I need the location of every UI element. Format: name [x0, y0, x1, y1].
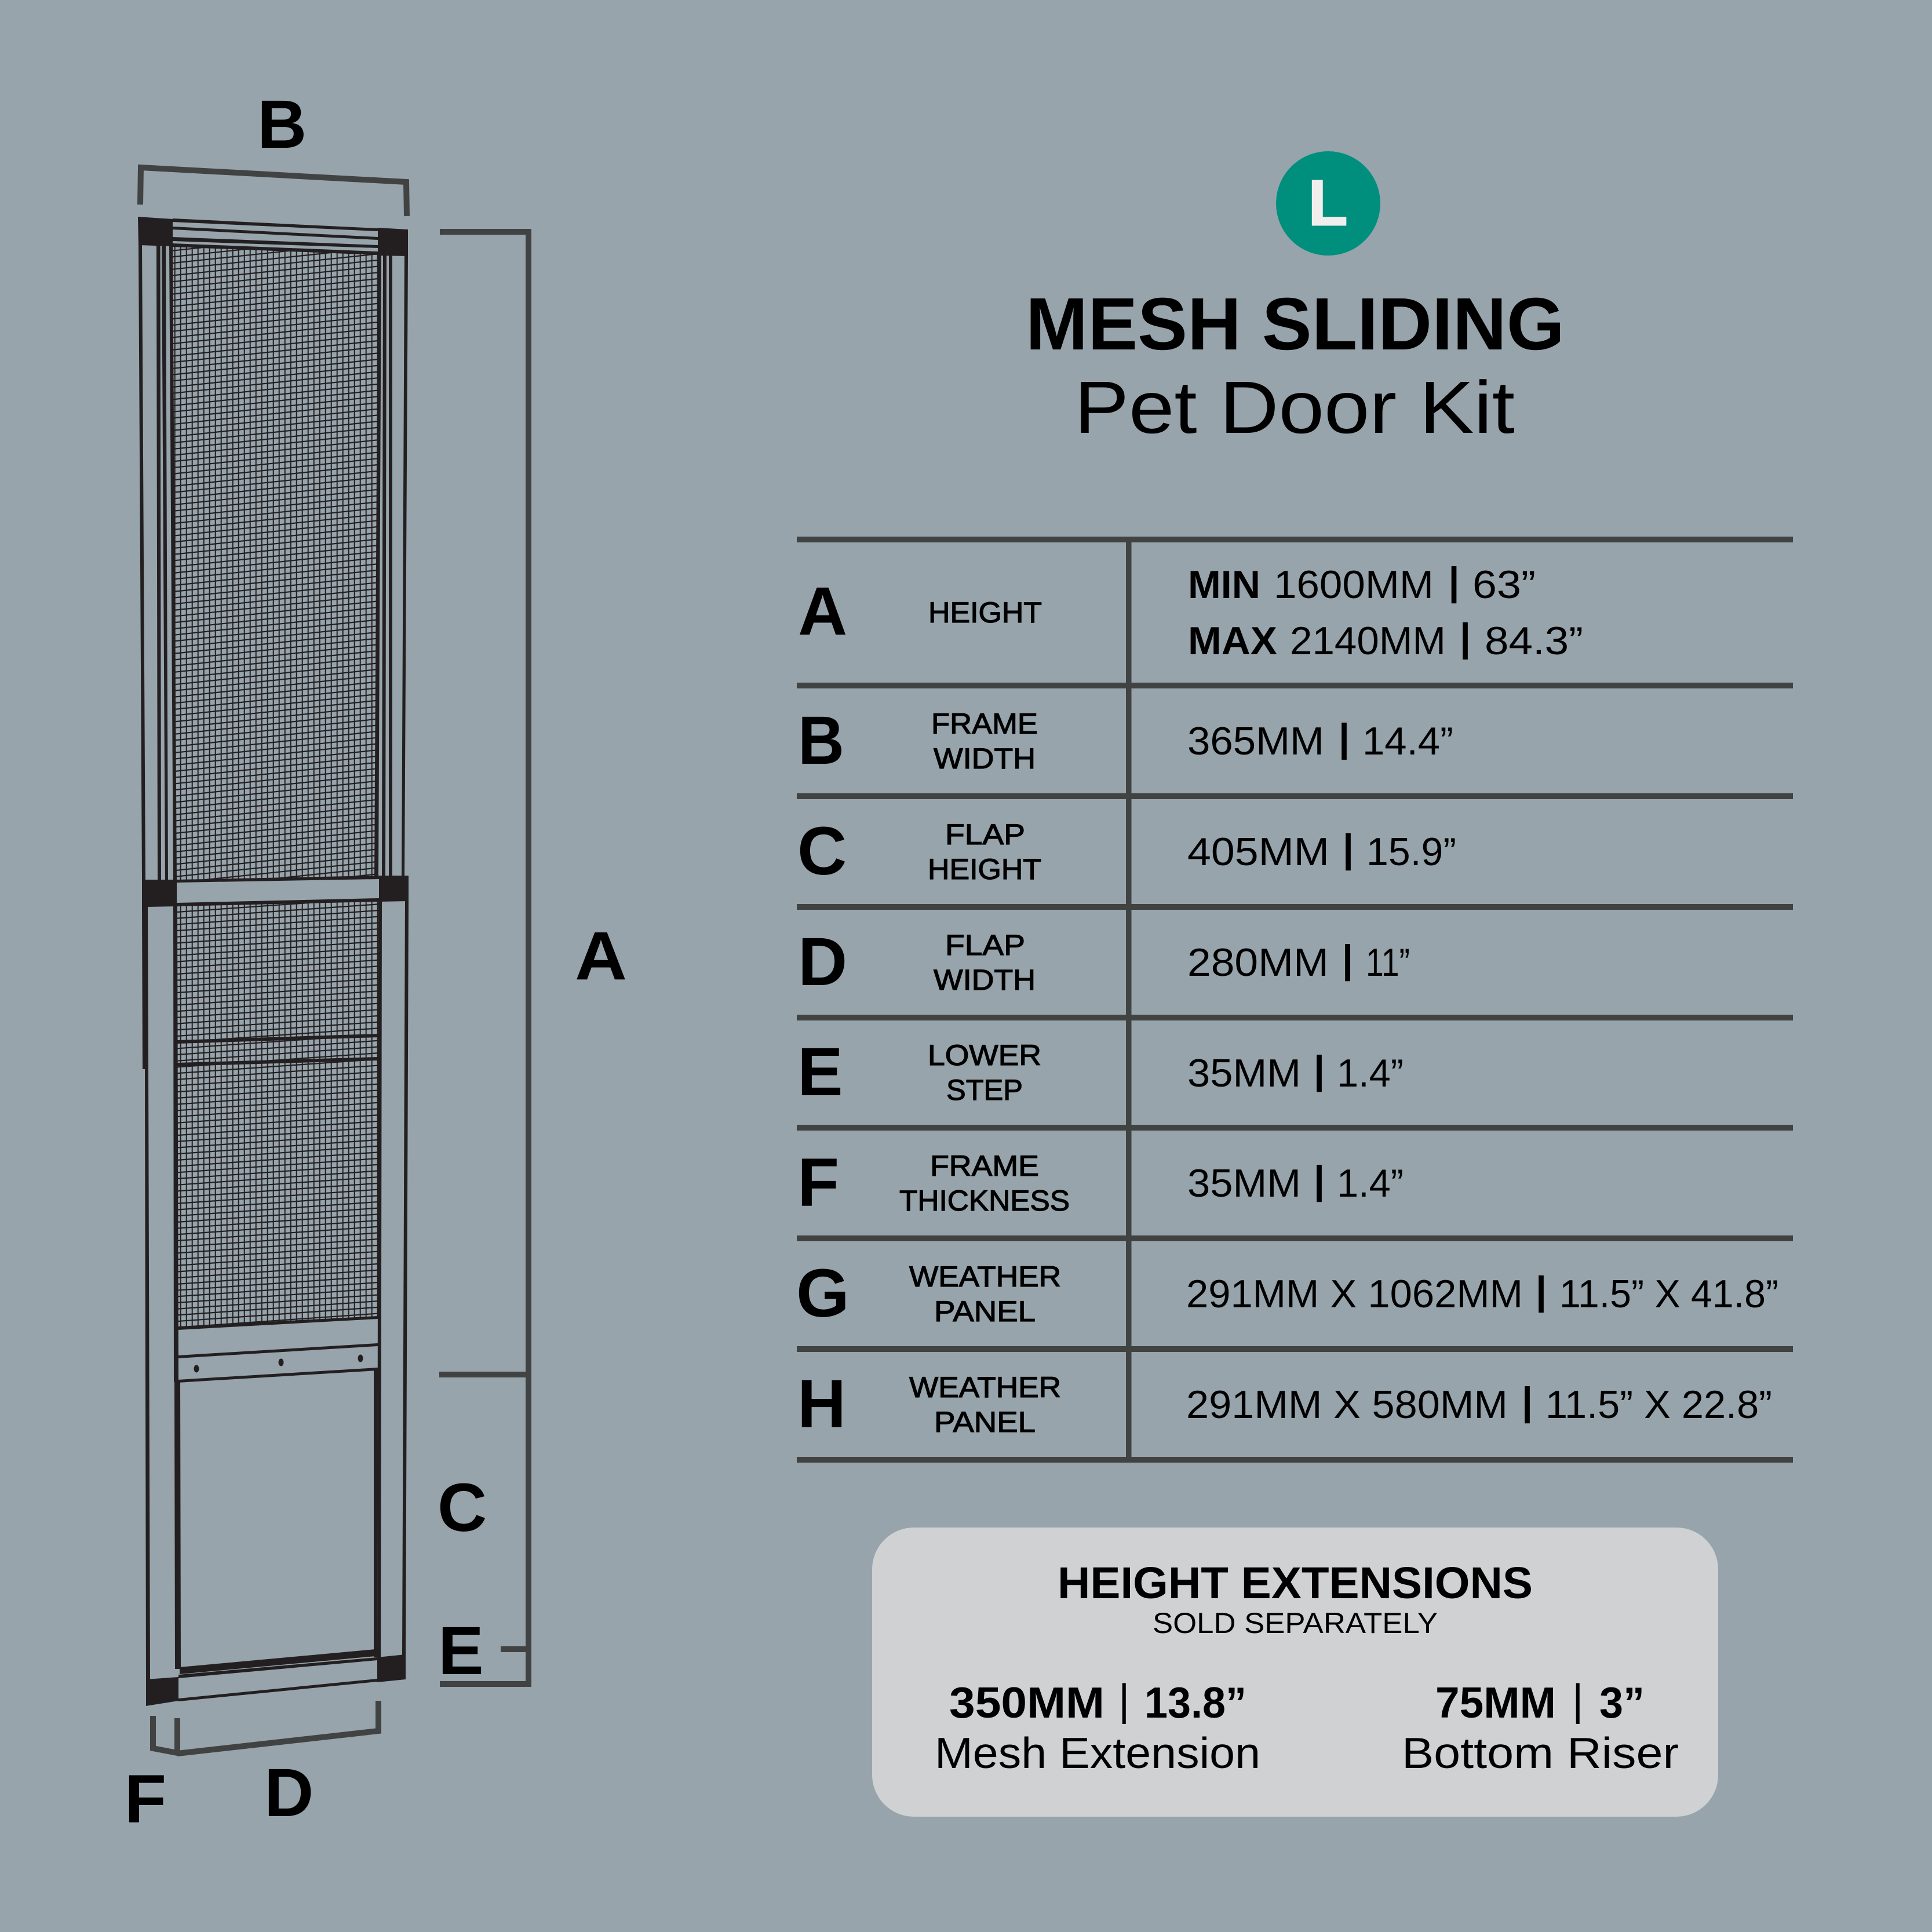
bracket B: [140, 167, 407, 216]
corner block: bottom left: [146, 1677, 178, 1706]
corner block: bottom right: [377, 1654, 406, 1682]
bracket A: [440, 232, 528, 1684]
row H: PANEL: [934, 1406, 1036, 1438]
screws: [194, 1355, 363, 1372]
row C: |: [1343, 826, 1354, 871]
row A: MAX: [1188, 619, 1277, 663]
row E: 35MM: [1187, 1051, 1301, 1095]
upper mesh panel: [173, 247, 378, 880]
row C: FLAP: [945, 818, 1025, 851]
mesh extension: 350MM: [949, 1678, 1104, 1727]
table grid: [797, 537, 1793, 1463]
diagram letter B: B: [257, 86, 307, 163]
row H: H: [797, 1366, 846, 1442]
row E: STEP: [946, 1074, 1023, 1106]
size badge: [1276, 151, 1380, 256]
row A: 84.3”: [1485, 619, 1583, 663]
row F: [797, 1144, 1404, 1221]
row F: THICKNESS: [899, 1184, 1070, 1217]
bracket F: [153, 1716, 177, 1753]
row H: WEATHER: [909, 1371, 1061, 1404]
lower frame rails: [142, 901, 409, 1679]
lower mesh panel: [177, 902, 378, 1326]
lower panel bars: [178, 1316, 378, 1383]
row H: [797, 1366, 1772, 1442]
tick E: [501, 1646, 528, 1652]
row E: [797, 1034, 1404, 1110]
diagram letter A: A: [575, 918, 627, 994]
row A: [798, 559, 1583, 663]
bottom riser: |: [1572, 1675, 1583, 1724]
bottom riser: Bottom Riser: [1402, 1729, 1679, 1777]
row D: WIDTH: [934, 964, 1036, 996]
flap bottom bars: [178, 1649, 377, 1701]
title: MESH SLIDING: [1026, 283, 1565, 366]
row D: D: [798, 924, 847, 1000]
row A: 1600MM: [1274, 563, 1434, 607]
row B: B: [798, 702, 844, 779]
row B: [798, 702, 1453, 779]
row B: 365MM: [1187, 719, 1324, 763]
row G: WEATHER: [909, 1260, 1061, 1293]
corner block: middle left: [142, 880, 177, 907]
row A: MIN: [1188, 563, 1260, 607]
row H: |: [1522, 1379, 1533, 1424]
diagram letter C: C: [438, 1470, 487, 1546]
specification table: [796, 537, 1793, 1463]
row G: 11.5” X 41.8”: [1559, 1272, 1778, 1316]
row D: [798, 924, 1410, 1000]
row G: G: [796, 1255, 850, 1332]
size badge: L: [1308, 167, 1347, 239]
row B: |: [1339, 716, 1350, 760]
row C: 15.9”: [1366, 830, 1456, 874]
row F: F: [797, 1144, 839, 1221]
mesh extension: [935, 1675, 1260, 1777]
title: [1026, 283, 1565, 449]
row E: E: [797, 1034, 843, 1110]
corner block: top left: [138, 217, 173, 246]
door diagram: [138, 214, 409, 1706]
mesh extension: 13.8”: [1144, 1678, 1246, 1727]
row H: 291MM X 580MM: [1186, 1383, 1508, 1427]
row C: [797, 813, 1456, 890]
bottom riser: 3”: [1599, 1678, 1645, 1727]
row G: PANEL: [934, 1295, 1036, 1328]
row G: |: [1536, 1268, 1547, 1313]
dimension brackets: [140, 167, 528, 1754]
row E: 1.4”: [1337, 1051, 1404, 1095]
row D: |: [1342, 937, 1353, 982]
upper frame rails: [138, 243, 408, 881]
row A: 2140MM: [1290, 619, 1446, 663]
title: Pet Door Kit: [1074, 366, 1515, 449]
row F: FRAME: [930, 1150, 1039, 1182]
mesh cross bars: [177, 1034, 378, 1066]
row C: 405MM: [1187, 830, 1329, 874]
card subheading: SOLD SEPARATELY: [1153, 1607, 1438, 1639]
row D: FLAP: [945, 929, 1025, 961]
row E: LOWER: [928, 1039, 1041, 1071]
row C: HEIGHT: [928, 853, 1041, 885]
corner block: middle right: [379, 876, 409, 902]
diagram letter F: F: [125, 1761, 166, 1838]
mesh extension: |: [1118, 1675, 1129, 1724]
row B: 14.4”: [1362, 719, 1453, 763]
bottom riser: 75MM: [1435, 1678, 1556, 1727]
row F: 1.4”: [1337, 1161, 1404, 1205]
mesh extension: Mesh Extension: [935, 1729, 1260, 1777]
row E: |: [1314, 1048, 1325, 1092]
row A: 63”: [1472, 563, 1536, 607]
card heading: HEIGHT EXTENSIONS: [1058, 1558, 1533, 1608]
row F: |: [1314, 1158, 1325, 1202]
bottom riser: [1402, 1675, 1679, 1777]
top slats: [173, 218, 378, 255]
row A: HEIGHT: [928, 596, 1042, 629]
row A: |: [1449, 559, 1460, 604]
row A: A: [798, 573, 847, 650]
row D: 11”: [1366, 941, 1410, 985]
row D: 280MM: [1187, 941, 1329, 985]
row A: |: [1460, 615, 1471, 660]
tick C: [439, 1372, 528, 1377]
bracket D: [177, 1701, 378, 1754]
row B: FRAME: [931, 708, 1038, 740]
diagram letter E: E: [438, 1613, 484, 1689]
corner block: top right: [378, 228, 408, 256]
middle rail: [177, 876, 379, 906]
row F: 35MM: [1187, 1161, 1301, 1205]
diagram letter D: D: [264, 1755, 314, 1831]
row G: [796, 1255, 1778, 1332]
row B: WIDTH: [934, 742, 1036, 775]
height extensions card: [872, 1528, 1718, 1817]
row H: 11.5” X 22.8”: [1545, 1383, 1772, 1427]
row C: C: [797, 813, 847, 890]
row G: 291MM X 1062MM: [1186, 1272, 1523, 1316]
